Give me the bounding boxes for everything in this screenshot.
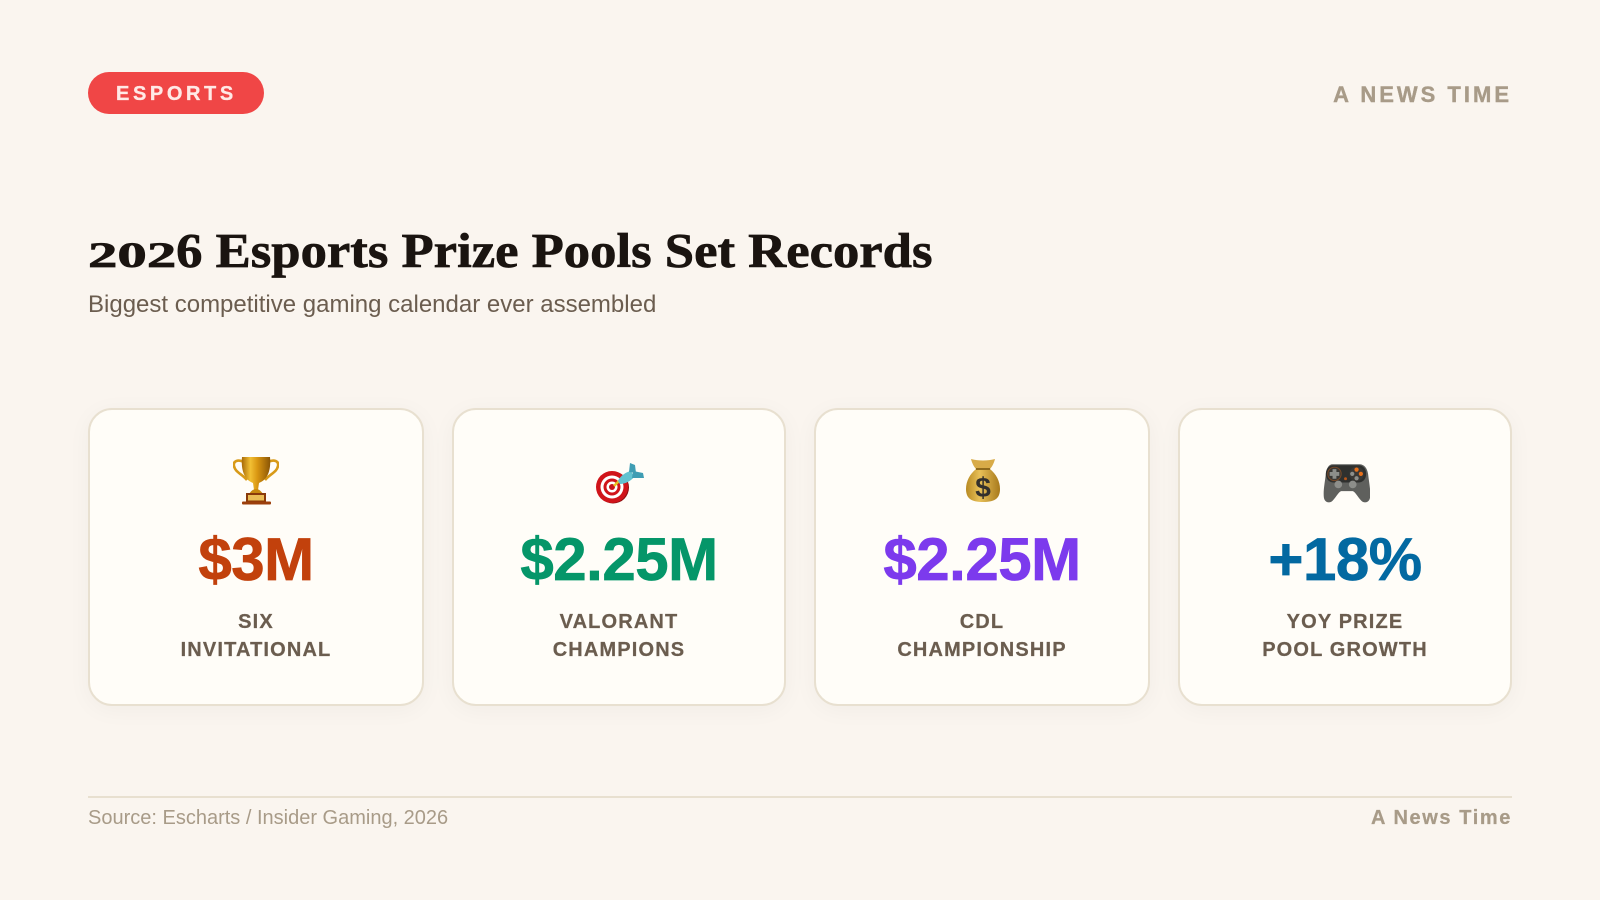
panel: SIX Invitational xyxy=(88,408,424,706)
source note: Source: Escharts / Insider Gaming, 2026 xyxy=(88,807,448,829)
label: INVITATIONAL xyxy=(181,639,331,661)
panel: CDL Championship xyxy=(814,408,1150,706)
title: 6 Esports Prize Pools Set Records xyxy=(176,223,932,278)
panel: YoY prize pool growth xyxy=(1178,408,1512,706)
label: POOL GROWTH xyxy=(1262,639,1428,661)
value: $2.25M xyxy=(883,526,1081,593)
value: +18% xyxy=(1268,526,1422,593)
brand name top right: A NEWS TIME xyxy=(1333,82,1512,107)
label: SIX xyxy=(238,611,274,633)
value: $3M xyxy=(198,526,314,593)
label: VALORANT xyxy=(560,611,678,633)
category badge xyxy=(88,72,264,114)
footer divider xyxy=(88,796,1512,798)
title: 202 xyxy=(88,235,176,275)
icon: trophy xyxy=(233,457,279,504)
label xyxy=(553,611,685,661)
icon: money bag xyxy=(966,459,1000,503)
panel: Valorant Champions xyxy=(452,408,786,706)
label xyxy=(181,611,331,661)
label: YOY PRIZE xyxy=(1287,611,1403,633)
label: CHAMPIONS xyxy=(553,639,685,661)
value: $2.25M xyxy=(520,526,718,593)
label xyxy=(1262,611,1428,661)
footer brand: A News Time xyxy=(1371,807,1512,829)
icon: money bag: $ xyxy=(975,472,991,503)
label xyxy=(897,611,1067,661)
label: CDL xyxy=(960,611,1004,633)
label: CHAMPIONSHIP xyxy=(897,639,1067,661)
icon: game controller xyxy=(1324,464,1370,502)
subtitle: Biggest competitive gaming calendar ever assembled xyxy=(88,291,656,318)
category badge: ESPORTS xyxy=(116,83,237,105)
icon: dart target xyxy=(596,463,644,504)
